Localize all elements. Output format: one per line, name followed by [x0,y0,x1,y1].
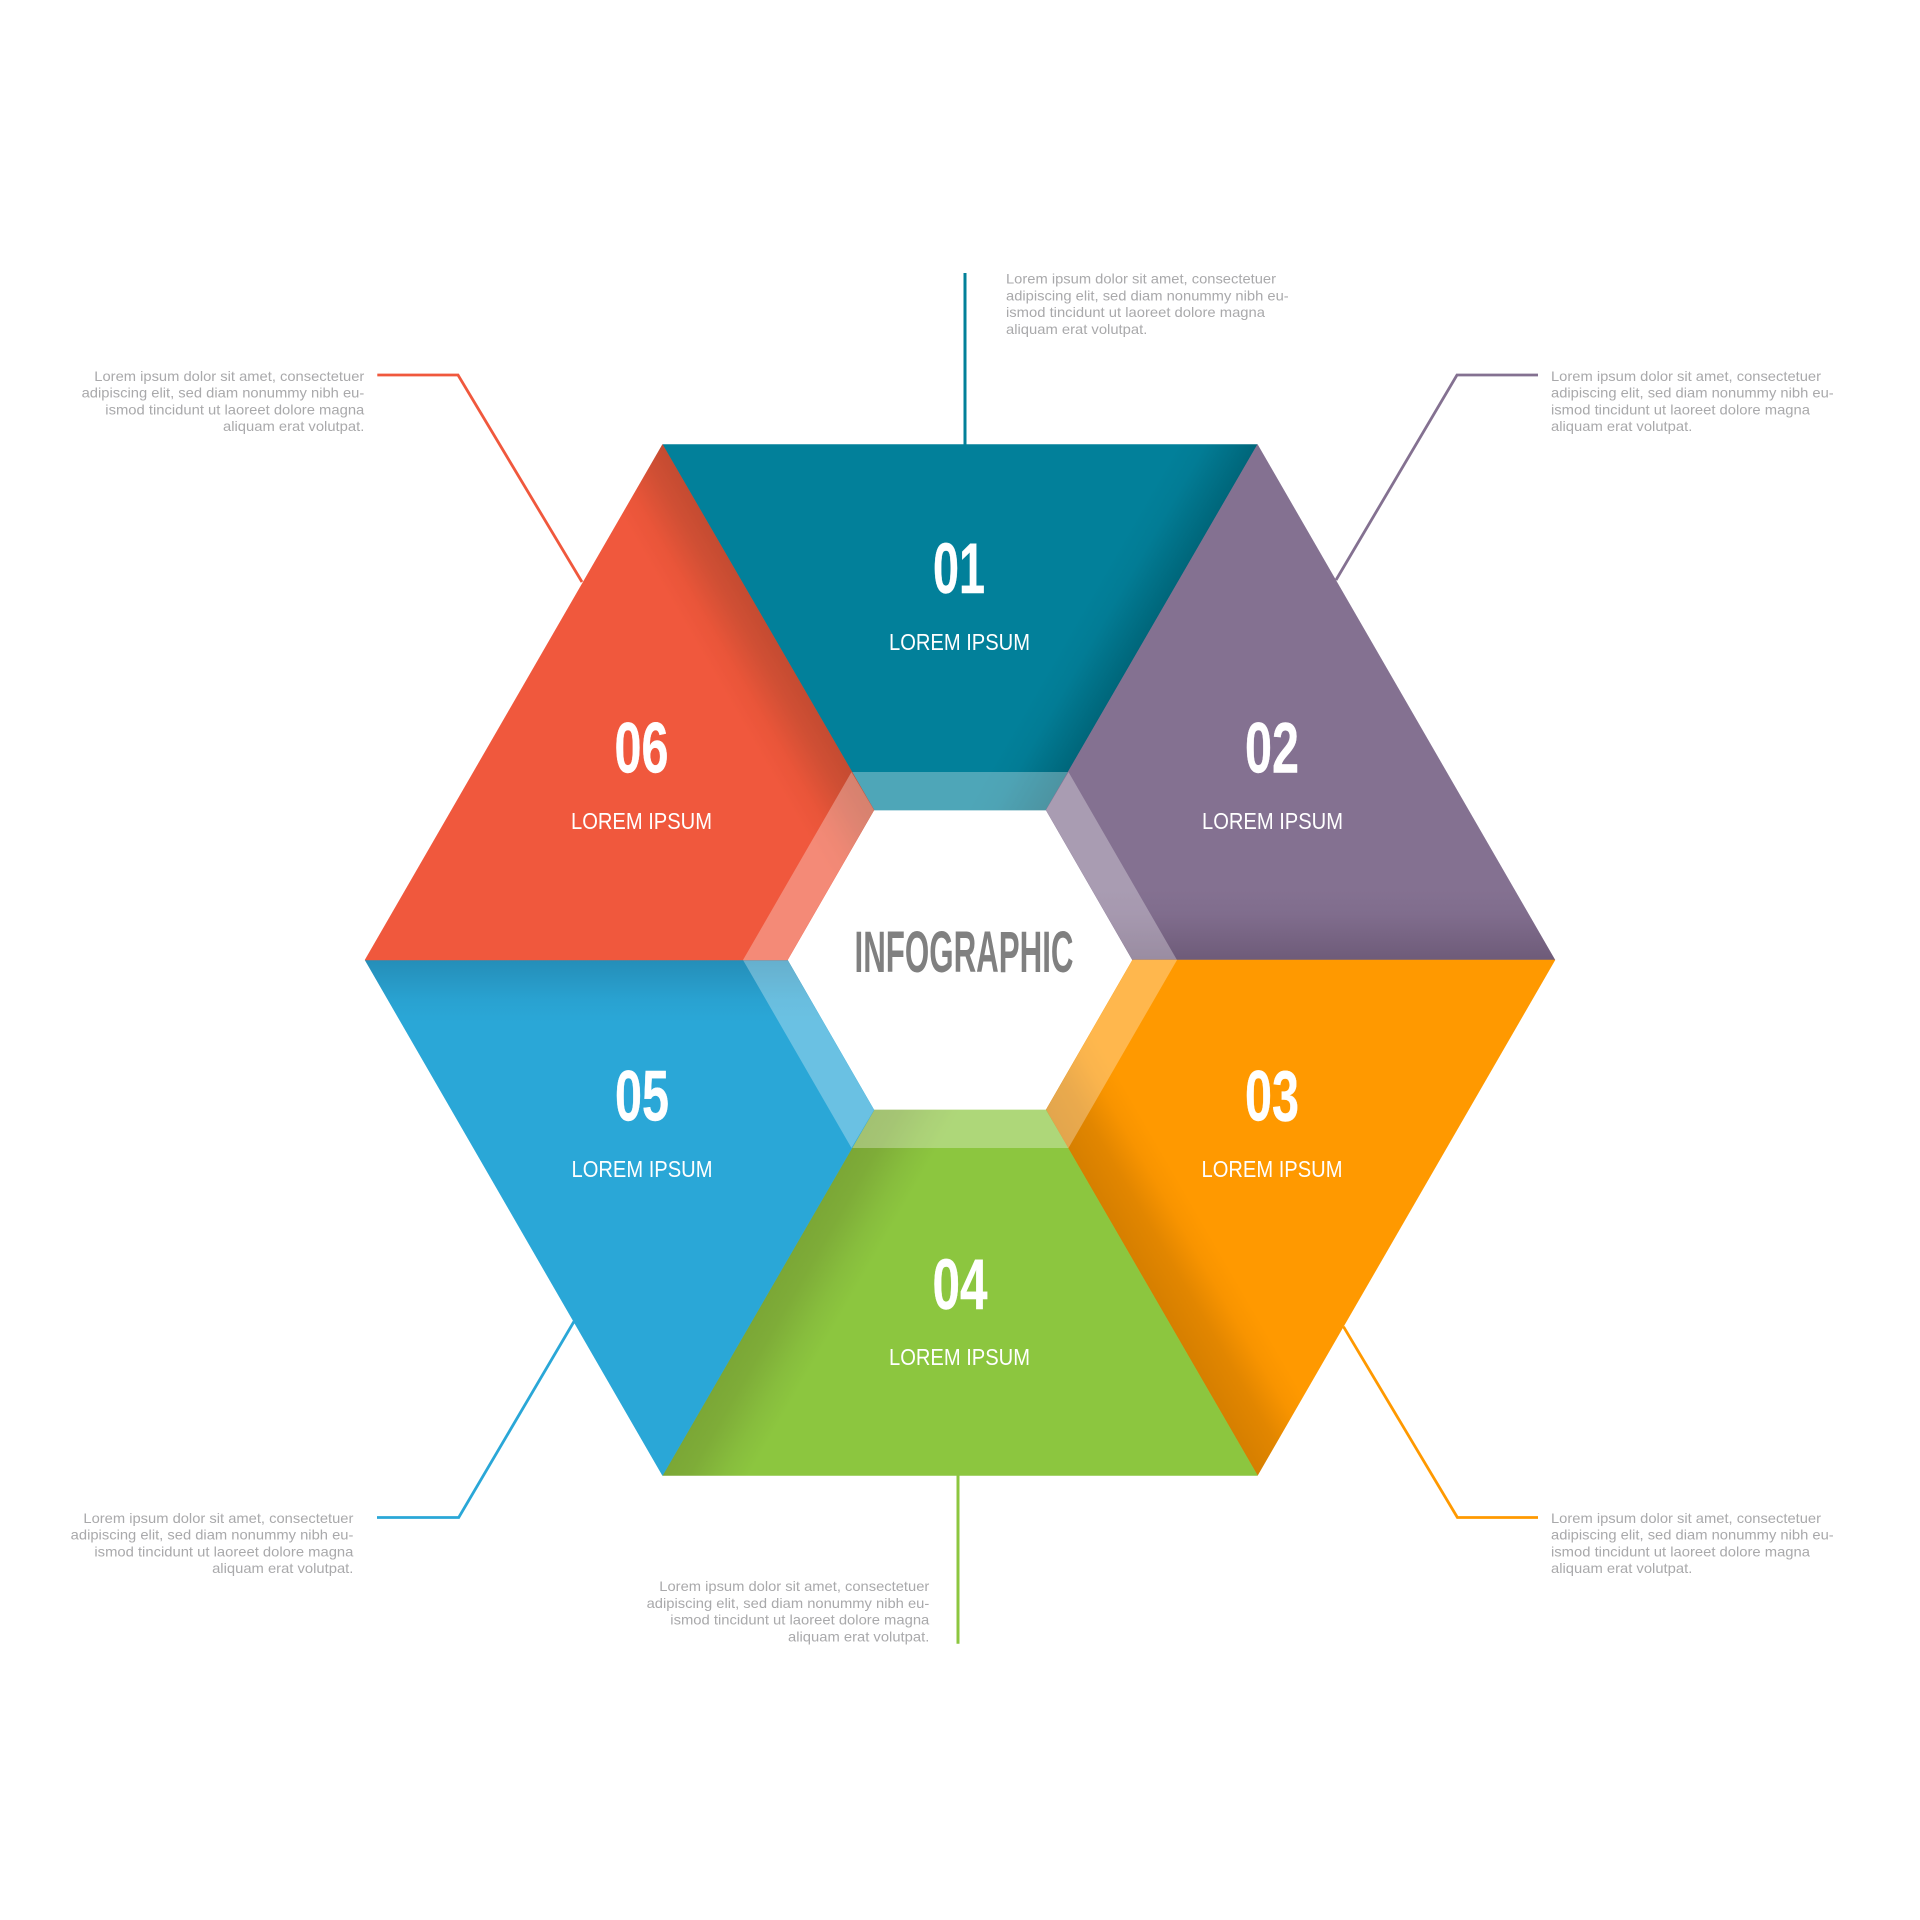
callout text 06 [82,368,365,434]
segment 06: red [365,444,874,960]
callout text 02: aliquam erat volutpat. [1551,418,1692,434]
callout text 03: adipiscing elit, sed diam nonummy nibh eu- [1551,1527,1834,1543]
callout text 04: aliquam erat volutpat. [788,1628,929,1644]
callout text 01: aliquam erat volutpat. [1006,321,1147,337]
segment 01: teal: 01 [933,530,985,609]
callout text 03: Lorem ipsum dolor sit amet, consectetuer [1551,1510,1821,1526]
segment 03: orange: 03 [1245,1058,1299,1136]
callout text 04 [647,1578,930,1644]
callout text 05: aliquam erat volutpat. [212,1560,353,1576]
segment 06: red: LOREM IPSUM [571,808,712,834]
segment 04: green [662,1110,1258,1476]
callout line 01 [964,273,966,445]
callout line 05 [377,1322,574,1518]
segment 05: blue [365,960,874,1476]
segment 02: purple: 02 [1245,710,1299,788]
callout text 05: adipiscing elit, sed diam nonummy nibh eu- [71,1527,354,1543]
segment 05: blue: 05 [615,1058,669,1136]
callout text 02: Lorem ipsum dolor sit amet, consectetuer [1551,368,1821,384]
segment 03: orange: LOREM IPSUM [1202,1156,1342,1182]
segment 06: red: 06 [614,710,668,788]
callout text 01: Lorem ipsum dolor sit amet, consectetuer [1006,270,1276,286]
callout text 05: ismod tincidunt ut laoreet dolore magna [94,1543,354,1559]
segment 01: teal: LOREM IPSUM [889,629,1030,655]
callout text 01 [1006,270,1289,337]
segment 04: green: LOREM IPSUM [889,1344,1030,1370]
callout text 01: adipiscing elit, sed diam nonummy nibh eu- [1006,287,1289,303]
callout text 06: ismod tincidunt ut laoreet dolore magna [105,401,365,417]
callout line 04 [956,1475,960,1644]
segment 04: green: 04 [932,1246,988,1325]
callout text 06: aliquam erat volutpat. [223,418,364,434]
callout text 03: ismod tincidunt ut laoreet dolore magna [1551,1543,1810,1559]
callout line 03 [1344,1327,1538,1518]
callout line 06 [377,375,582,582]
callout text 06: Lorem ipsum dolor sit amet, consectetuer [94,368,365,384]
callout text 04: Lorem ipsum dolor sit amet, consectetuer [659,1578,930,1594]
callout text 02: adipiscing elit, sed diam nonummy nibh eu- [1551,385,1834,401]
segment 01: teal [662,444,1258,810]
callout text 05: Lorem ipsum dolor sit amet, consectetuer [83,1510,354,1526]
callout text 04: ismod tincidunt ut laoreet dolore magna [670,1612,930,1628]
segment 05: blue: LOREM IPSUM [572,1156,712,1182]
callout text 02: ismod tincidunt ut laoreet dolore magna [1551,401,1810,417]
callout text 01: ismod tincidunt ut laoreet dolore magna [1006,304,1265,320]
callout line 02 [1336,375,1538,580]
callout text 03: aliquam erat volutpat. [1551,1560,1692,1576]
callout text 06: adipiscing elit, sed diam nonummy nibh eu- [82,385,365,401]
callout text 04: adipiscing elit, sed diam nonummy nibh eu- [647,1595,930,1611]
segment 02: purple: LOREM IPSUM [1202,808,1343,834]
segment 02: purple [1046,444,1555,960]
callout text 05 [71,1510,354,1576]
segment 03: orange [1046,960,1555,1476]
callout text 02 [1551,368,1834,434]
center title: INFOGRAPHIC [854,920,1074,985]
callout text 03 [1551,1510,1834,1576]
